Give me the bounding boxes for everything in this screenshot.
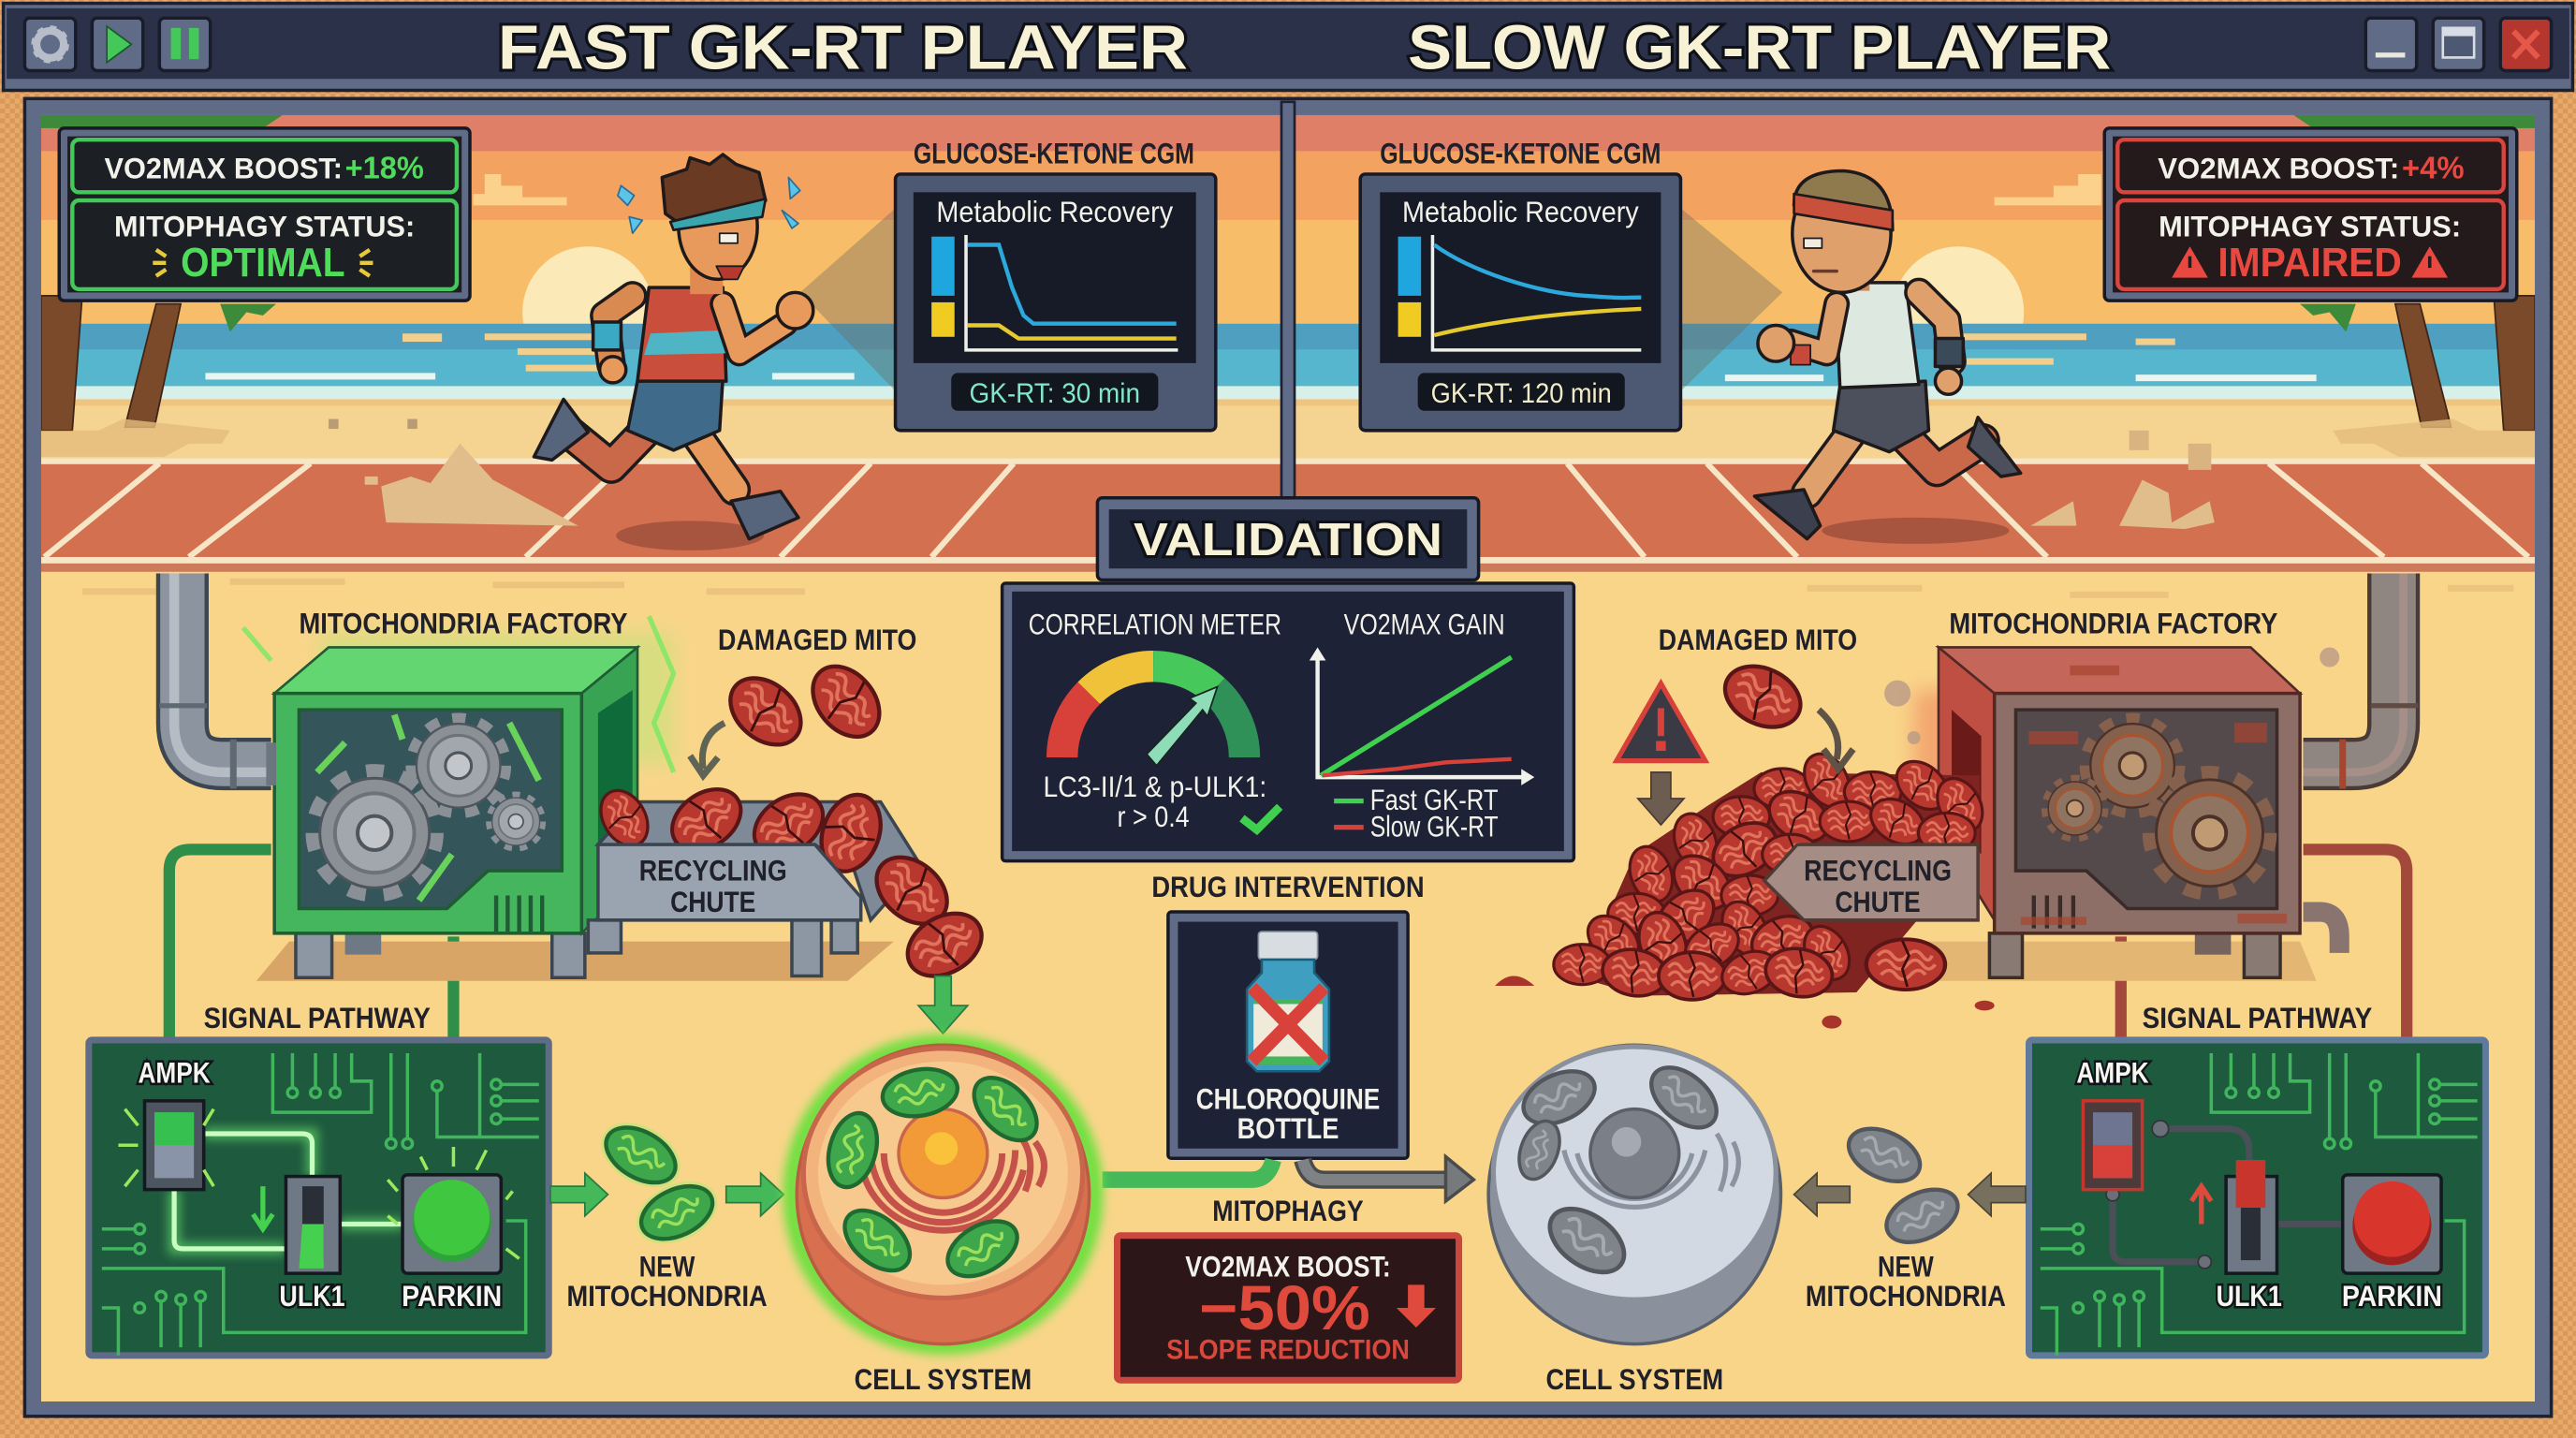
label: cell left: CELL SYSTEM — [855, 1362, 1032, 1396]
label: new mito right: MITOCHONDRIA — [1806, 1279, 2006, 1313]
arrow: curved grey — [690, 723, 724, 775]
VO2max gain line chart — [1310, 607, 1534, 843]
label: new mito left — [567, 1250, 768, 1313]
label: cell right: CELL SYSTEM — [1546, 1362, 1723, 1396]
panel: chloroquine bottle: CHLOROQUINE — [1196, 1082, 1380, 1116]
callout: VO2max boost reduction: VO2MAX BOOST: — [1185, 1250, 1391, 1284]
VO2max gain line chart: Fast GK-RT — [1370, 783, 1499, 816]
loose mitochondria fragments — [1495, 654, 1995, 1029]
centre divider — [1281, 102, 1295, 501]
arrow: mito to cell left — [726, 1173, 783, 1216]
recycling chute left — [592, 777, 920, 920]
validation banner: VALIDATION — [1134, 515, 1442, 565]
green machine glow — [320, 633, 674, 764]
label: factory right: MITOCHONDRIA FACTORY — [1949, 607, 2277, 640]
VO2max gain line chart: Slow GK-RT — [1370, 809, 1499, 843]
runner: slow player — [1754, 171, 2021, 539]
panel: chloroquine bottle — [1168, 912, 1408, 1158]
panel: CGM monitor fast: GK-RT: 30 min — [970, 378, 1140, 409]
title bar — [4, 4, 2572, 91]
panel: signal board left — [89, 1040, 549, 1356]
label: CGM left: GLUCOSE-KETONE CGM — [914, 137, 1194, 170]
callout: VO2max boost reduction — [1117, 1236, 1459, 1380]
glowing wires — [174, 1134, 402, 1249]
dust cloud right — [1822, 431, 2215, 544]
red opening glow — [1914, 690, 1980, 822]
label: new mito left: MITOCHONDRIA — [567, 1279, 768, 1313]
label: new mito left: NEW — [639, 1250, 695, 1284]
icon: warning triangle — [1617, 683, 1705, 761]
callout: VO2max boost reduction: SLOPE REDUCTION — [1166, 1334, 1410, 1365]
HUD: slow player stats — [2104, 128, 2517, 301]
arrow: green down — [918, 976, 968, 1034]
label: new mito right: NEW — [1878, 1250, 1934, 1284]
HUD: fast player stats: +18% — [345, 151, 424, 185]
dust cloud left — [329, 419, 764, 550]
cell system green — [792, 1043, 1094, 1345]
pipe right — [2304, 574, 2418, 788]
PARKIN button off: PARKIN — [2342, 1279, 2442, 1313]
HUD: slow player stats: IMPAIRED — [2217, 240, 2402, 286]
heading: slow player: SLOW GK-RT PLAYER — [1408, 14, 2111, 83]
correlation meter gauge: LC3-II/1 & p-ULK1: — [1044, 770, 1266, 803]
label: new mito right — [1806, 1250, 2006, 1313]
HUD: slow player stats: +4% — [2402, 151, 2465, 185]
label: factory left: MITOCHONDRIA FACTORY — [299, 607, 627, 640]
button: minimise — [2365, 18, 2417, 70]
ULK1 lever up: ULK1 — [2217, 1279, 2282, 1313]
button: maximise — [2433, 18, 2484, 70]
correlation meter gauge: r > 0.4 — [1117, 800, 1190, 833]
projector beams — [800, 205, 1782, 394]
heading: fast player: FAST GK-RT PLAYER — [498, 14, 1188, 83]
correlation meter gauge: CORRELATION METER — [1029, 607, 1281, 640]
dead wires — [2113, 1129, 2343, 1262]
running track — [41, 459, 2535, 572]
arrow: board to new mito right — [1969, 1173, 2026, 1216]
AMPK switch on — [138, 1056, 211, 1190]
conveyor legs — [588, 920, 857, 976]
pipe left — [159, 574, 271, 788]
ULK1 lever up — [2217, 1160, 2282, 1313]
panel: CGM monitor slow — [1360, 174, 1680, 431]
panel: CGM monitor slow: GK-RT: 120 min — [1431, 378, 1612, 409]
recycling chute right — [1764, 844, 1978, 920]
label: mitophagy: MITOPHAGY — [1212, 1194, 1364, 1227]
HUD: fast player stats: MITOPHAGY STATUS: — [114, 210, 415, 243]
signal wires right — [2121, 849, 2407, 1038]
recycling chute right: CHUTE — [1835, 885, 1921, 918]
HUD: slow player stats: VO2MAX BOOST: — [2158, 151, 2399, 184]
left factory assembly — [159, 574, 993, 1038]
panel: signal board right — [2029, 1040, 2485, 1356]
label: drug intervention: DRUG INTERVENTION — [1151, 870, 1425, 903]
panel: CGM monitor fast: Metabolic Recovery — [936, 195, 1173, 228]
panel: CGM monitor slow: Metabolic Recovery — [1402, 195, 1639, 228]
new mitochondria right — [1840, 1118, 1966, 1253]
icon: bottle with red cross — [1247, 932, 1329, 1071]
AMPK switch on: AMPK — [138, 1056, 211, 1090]
button: pause — [159, 18, 211, 70]
arrow: board to new mito left — [550, 1173, 607, 1216]
panel: CGM monitor fast — [896, 174, 1216, 431]
label: CGM right: GLUCOSE-KETONE CGM — [1380, 137, 1661, 170]
PARKIN button — [402, 1175, 502, 1313]
factory machine green — [243, 616, 674, 977]
VO2max gain line chart: VO2MAX GAIN — [1344, 607, 1505, 640]
palm trees left — [41, 115, 283, 431]
label: signal pathway right: SIGNAL PATHWAY — [2143, 1001, 2372, 1034]
button: play — [92, 18, 143, 70]
arrow: mito to cell right — [1794, 1173, 1850, 1216]
panel: validation charts — [1003, 583, 1573, 861]
signal wires left — [169, 849, 453, 1038]
correlation meter gauge — [1029, 607, 1281, 833]
HUD: fast player stats: VO2MAX BOOST: — [105, 151, 343, 184]
arrow: up in board — [2191, 1186, 2211, 1224]
cell system grey — [1488, 1045, 1781, 1344]
runner: fast player — [534, 154, 813, 539]
arrow: mitophagy green path — [1103, 1160, 1273, 1180]
button: settings gear — [24, 18, 76, 70]
AMPK switch off: AMPK — [2076, 1056, 2149, 1090]
button: close — [2500, 18, 2552, 70]
label: damaged right: DAMAGED MITO — [1659, 623, 1857, 656]
right factory assembly — [1495, 574, 2418, 1038]
AMPK switch off — [2076, 1056, 2149, 1190]
recycling chute left: RECYCLING — [639, 854, 787, 888]
arrow: curved brown — [1819, 710, 1853, 769]
HUD: fast player stats — [59, 128, 470, 301]
label: signal pathway left: SIGNAL PATHWAY — [204, 1001, 431, 1034]
PARKIN button off — [2342, 1175, 2442, 1313]
callout: VO2max boost reduction: −50% — [1199, 1274, 1370, 1343]
arrow: brown down — [1638, 772, 1684, 825]
falling damaged mitochondria — [717, 653, 993, 989]
damaged mitochondria pile — [1554, 746, 1992, 1002]
factory machine rusty — [1939, 647, 2300, 977]
beach shadow patches — [41, 419, 230, 457]
arrow: down in board — [253, 1186, 272, 1229]
arrow: mitophagy grey path — [1303, 1157, 1473, 1201]
new mitochondria left — [590, 1109, 727, 1256]
HUD: fast player stats: OPTIMAL — [181, 240, 345, 286]
recycling chute left: CHUTE — [670, 885, 755, 918]
validation banner — [1097, 498, 1479, 580]
panel: chloroquine bottle: BOTTLE — [1237, 1111, 1339, 1145]
palm trees right — [2293, 115, 2535, 431]
recycling chute right: RECYCLING — [1804, 854, 1952, 888]
ULK1 lever — [279, 1177, 345, 1313]
label: damaged left: DAMAGED MITO — [718, 623, 916, 656]
ULK1 lever: ULK1 — [279, 1279, 345, 1313]
HUD: slow player stats: MITOPHAGY STATUS: — [2159, 210, 2461, 243]
PARKIN button: PARKIN — [402, 1279, 502, 1313]
